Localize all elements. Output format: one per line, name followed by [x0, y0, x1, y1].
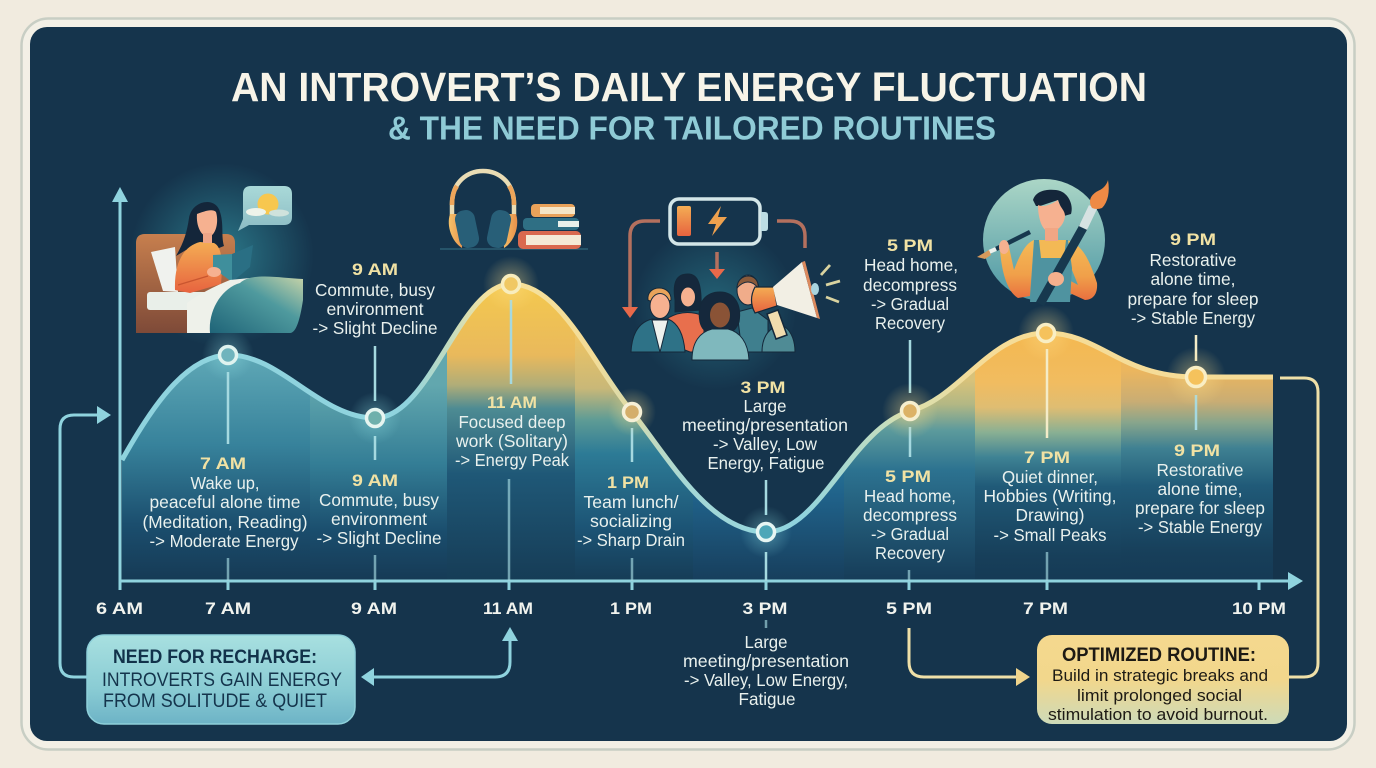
label: 9 AM upper: Commute, busy	[315, 280, 435, 300]
label: 7 AM: -> Moderate Energy	[150, 531, 299, 551]
callout: optimized routine	[1037, 635, 1289, 724]
energy curve area	[120, 280, 1273, 581]
label: 9 AM lower: environment	[331, 509, 427, 529]
crowd	[631, 274, 795, 360]
time axis labels: 3 PM	[742, 599, 788, 618]
time axis labels: 6 AM	[96, 599, 143, 618]
label: 7 PM: 7 PM	[1024, 448, 1070, 467]
label: 9 AM lower: -> Slight Decline	[316, 528, 442, 548]
time axis labels: 10 PM	[1232, 599, 1286, 618]
label: 3 PM upper: 3 PM	[740, 378, 786, 397]
label: 9 AM upper: 9 AM	[352, 260, 398, 279]
label: 9 PM upper: Restorative	[1150, 250, 1236, 270]
label: 11 AM	[455, 393, 569, 470]
node markers	[202, 256, 1226, 558]
title	[231, 64, 1147, 146]
label: 9 AM lower: Commute, busy	[319, 490, 439, 510]
label: 7 AM: peaceful alone time	[150, 492, 300, 512]
label: 7 PM	[984, 448, 1116, 545]
label: 9 PM upper: -> Stable Energy	[1131, 308, 1255, 328]
label: 5 PM upper: Recovery	[875, 313, 945, 333]
label: 3 PM upper: -> Valley, Low	[713, 434, 817, 454]
time axis labels	[96, 599, 1286, 618]
icon: painter with brush	[977, 179, 1109, 304]
callout: optimized routine: stimulation to avoid burnout.	[1048, 705, 1268, 724]
label: 9 AM lower	[316, 471, 442, 548]
label: 9 PM upper: alone time,	[1150, 269, 1236, 289]
label: 3 PM upper	[682, 378, 848, 473]
arrow: recharge to morning curve	[60, 406, 111, 677]
label: 7 AM: (Meditation, Reading)	[142, 512, 308, 532]
label: 11 AM: -> Energy Peak	[455, 450, 569, 470]
label: 1 PM	[577, 473, 685, 550]
label: 1 PM: 1 PM	[607, 473, 649, 492]
label: 7 PM: Hobbies (Writing,	[984, 486, 1116, 506]
label: 1 PM: socializing	[590, 511, 672, 531]
label: 9 AM upper	[312, 260, 438, 338]
label: 3 PM lower	[683, 632, 849, 709]
callout: optimized routine: Build in strategic breaks and	[1052, 666, 1268, 685]
energy curve line	[122, 284, 1273, 532]
label: 5 PM lower: decompress	[863, 505, 957, 525]
leader lines	[228, 300, 1196, 628]
icon: battery, crowd and megaphone	[622, 199, 840, 390]
icon: speech bubble with sun	[238, 186, 292, 231]
icon: woman reading in bed	[130, 163, 314, 347]
callout: need for recharge: INTROVERTS GAIN ENERGY	[102, 670, 342, 691]
label: 9 PM lower: prepare for sleep	[1135, 498, 1265, 518]
label: 5 PM lower: -> Gradual	[871, 524, 949, 544]
label: 9 PM lower: Restorative	[1156, 460, 1244, 480]
label: 3 PM lower: Large	[744, 632, 788, 652]
time axis labels: 11 AM	[483, 599, 533, 618]
arrow: recharge to 11 AM	[361, 627, 518, 686]
callout: optimized routine: limit prolonged social	[1077, 686, 1242, 705]
label: 5 PM upper: -> Gradual	[871, 294, 949, 314]
callout: need for recharge: NEED FOR RECHARGE:	[113, 647, 317, 668]
label: 11 AM: work (Solitary)	[455, 431, 568, 451]
label: 11 AM: 11 AM	[487, 393, 537, 412]
label: 7 AM: 7 AM	[200, 454, 246, 473]
time axis labels: 9 AM	[351, 599, 397, 618]
label: 7 PM: -> Small Peaks	[994, 525, 1107, 545]
label: 9 PM lower: alone time,	[1158, 479, 1242, 499]
label: 7 AM: Wake up,	[190, 473, 260, 493]
label: 5 PM lower: 5 PM	[885, 467, 931, 486]
label: 5 PM upper: decompress	[863, 275, 957, 295]
callout: need for recharge: FROM SOLITUDE & QUIET	[103, 691, 327, 712]
label: 3 PM upper: meeting/presentation	[682, 415, 848, 435]
label: 9 AM upper: -> Slight Decline	[312, 318, 438, 338]
arrow: 5 PM to routine	[909, 628, 1030, 686]
callout: need for recharge	[87, 635, 355, 724]
battery	[670, 199, 768, 244]
callout: optimized routine: OPTIMIZED ROUTINE:	[1062, 645, 1256, 666]
arrow: 10 PM to routine	[1280, 378, 1318, 677]
label: 9 PM lower	[1135, 441, 1265, 537]
megaphone	[752, 261, 840, 339]
label: 9 PM lower: 9 PM	[1174, 441, 1220, 460]
label: 9 PM upper: 9 PM	[1170, 230, 1216, 249]
label: 9 PM upper	[1128, 230, 1258, 328]
red arrows	[622, 221, 805, 318]
label: 1 PM: -> Sharp Drain	[577, 530, 685, 550]
time axis labels: 7 AM	[205, 599, 251, 618]
label: 5 PM lower: Head home,	[864, 486, 956, 506]
icon: headphones and books	[440, 171, 588, 250]
book	[207, 245, 253, 282]
label: 5 PM lower: Recovery	[875, 543, 945, 563]
label: 7 PM: Quiet dinner,	[1002, 467, 1098, 487]
label: 3 PM upper: Energy, Fatigue	[708, 453, 824, 473]
label: 5 PM lower	[863, 467, 957, 563]
title: AN INTROVERT’S DAILY ENERGY FLUCTUATION	[231, 64, 1147, 110]
time axis labels: 5 PM	[886, 599, 932, 618]
label: 9 PM upper: prepare for sleep	[1128, 289, 1258, 309]
label: 7 PM: Drawing)	[1016, 505, 1084, 525]
label: 5 PM upper: 5 PM	[887, 236, 933, 255]
label: 9 AM upper: environment	[326, 299, 424, 319]
label: 5 PM upper: Head home,	[864, 255, 958, 275]
label: 3 PM lower: Fatigue	[738, 689, 796, 709]
label: 9 PM lower: -> Stable Energy	[1138, 517, 1262, 537]
time axis labels: 7 PM	[1023, 599, 1068, 618]
label: 3 PM lower: -> Valley, Low Energy,	[684, 670, 848, 690]
axes	[112, 187, 1303, 590]
label: 9 AM lower: 9 AM	[352, 471, 398, 490]
time axis labels: 1 PM	[610, 599, 652, 618]
label: 3 PM upper: Large	[744, 396, 786, 416]
label: 7 AM	[142, 454, 308, 551]
label: 11 AM: Focused deep	[458, 412, 566, 432]
label: 5 PM upper	[863, 236, 958, 333]
label: 3 PM lower: meeting/presentation	[683, 651, 849, 671]
subtitle: & THE NEED FOR TAILORED ROUTINES	[388, 110, 996, 146]
label: 1 PM: Team lunch/	[584, 492, 679, 512]
